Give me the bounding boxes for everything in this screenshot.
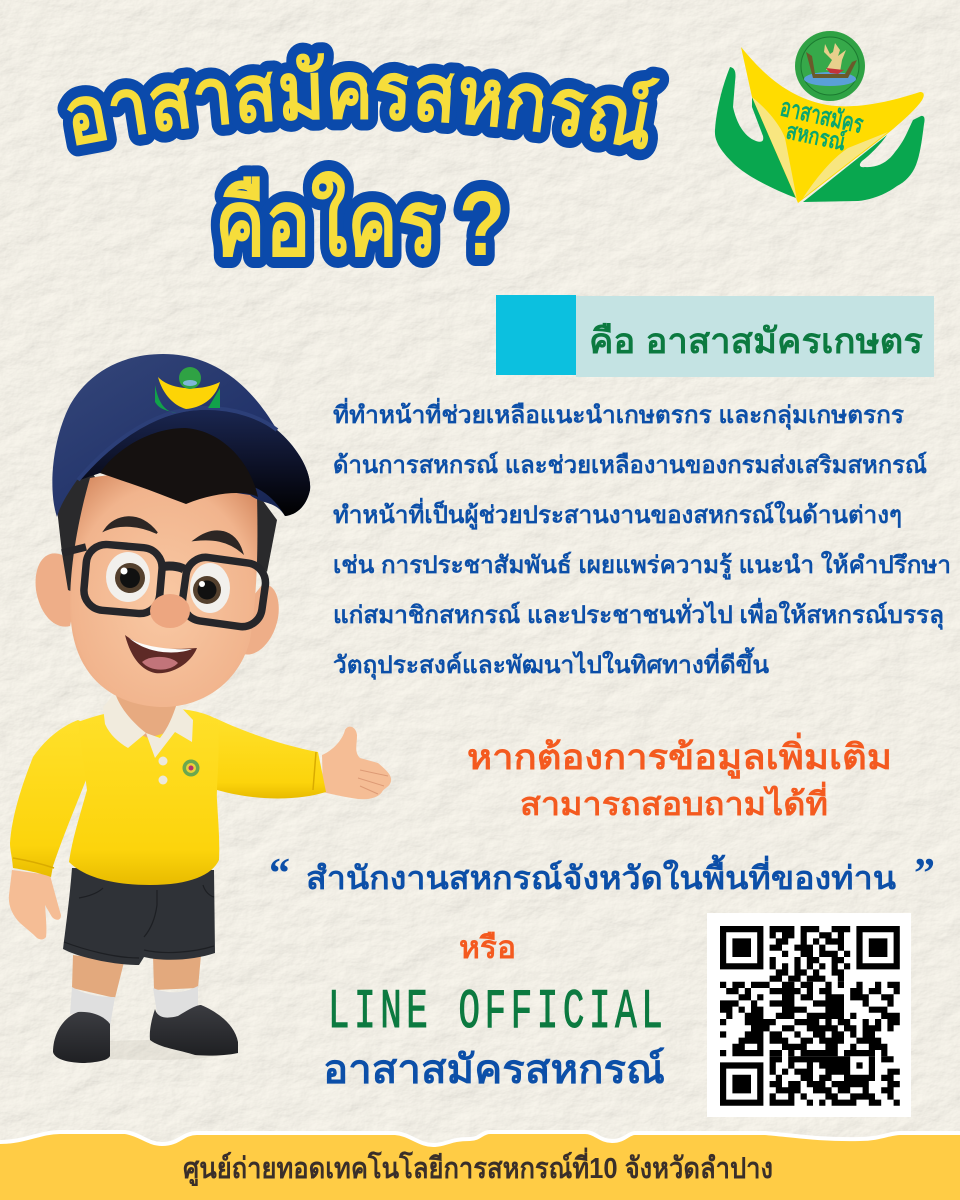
logo yellow ribbon bbox=[741, 47, 924, 203]
shirt buttons bbox=[158, 756, 168, 784]
description text block: ทำหน้าที่เป็นผู้ช่วยประสานงานของสหกรณ์ในด้านต่างๆ bbox=[333, 497, 902, 530]
contact heading: สามารถสอบถามได้ที่ bbox=[520, 781, 828, 822]
left sock bbox=[70, 987, 115, 1026]
description text block: เช่น การประชาสัมพันธ์ เผยแพร่ความรู้ แนะนำ ให้คำปรึกษา bbox=[333, 550, 951, 580]
cap bbox=[52, 354, 310, 517]
description text block: วัตถุประสงค์และพัฒนาไปในทิศทางที่ดีขึ้น bbox=[333, 646, 770, 681]
left eye bbox=[106, 552, 150, 602]
logo text bbox=[778, 94, 866, 155]
banner text: คือ อาสาสมัครเกษตร bbox=[589, 322, 923, 361]
title line 1: อาสาสมัครสหกรณ์ bbox=[58, 42, 670, 160]
description text block bbox=[333, 397, 951, 681]
nose bbox=[150, 594, 190, 628]
cap logo bbox=[155, 367, 220, 413]
cap under brim bbox=[80, 410, 310, 516]
description text block: ที่ทำหน้าที่ช่วยเหลือแนะนำเกษตรกร และกลุ่มเกษตรกร bbox=[333, 397, 904, 431]
mouth bbox=[125, 635, 197, 673]
logo text: อาสาสมัคร bbox=[778, 94, 866, 139]
logo: volunteer cooperative hands bbox=[715, 31, 925, 203]
logo text: สหกรณ์ bbox=[784, 117, 848, 155]
office quote: สำนักงานสหกรณ์จังหวัดในพื้นที่ของท่าน bbox=[306, 854, 896, 896]
contact heading bbox=[467, 732, 892, 822]
shorts bbox=[63, 868, 215, 965]
cap brim edge bbox=[78, 408, 277, 480]
right hand bbox=[322, 727, 391, 799]
torso sweater bbox=[69, 708, 219, 885]
or label: หรือ bbox=[459, 930, 516, 965]
footer band bbox=[0, 1132, 960, 1200]
office quote: ” bbox=[914, 851, 935, 897]
glasses bbox=[62, 543, 268, 629]
description text block: ด้านการสหกรณ์ และช่วยเหลืองานของกรมส่งเสริมสหกรณ์ bbox=[333, 451, 927, 479]
logo seal bbox=[795, 31, 865, 101]
right arm sleeve bbox=[215, 718, 326, 798]
left shoe bbox=[53, 1012, 110, 1063]
right ear bbox=[243, 585, 279, 655]
volunteer name: อาสาสมัครสหกรณ์ bbox=[323, 1047, 665, 1092]
left hand bbox=[9, 870, 61, 939]
qr code bbox=[707, 913, 911, 1117]
collar bbox=[103, 693, 193, 758]
banner cyan block bbox=[496, 295, 576, 375]
office quote bbox=[269, 851, 935, 897]
line official label: LINE OFFICIAL bbox=[328, 982, 663, 1045]
mascot character bbox=[9, 354, 391, 1063]
face bbox=[70, 473, 257, 707]
logo pale strips bbox=[752, 97, 888, 200]
description text block: แก่สมาชิกสหกรณ์ และประชาชนทั่วไป เพื่อให้สหกรณ์บรรลุ bbox=[333, 597, 944, 631]
left ear bbox=[36, 553, 78, 627]
cap silhouette bbox=[52, 354, 310, 517]
contact heading: หากต้องการข้อมูลเพิ่มเติม bbox=[467, 732, 892, 779]
fringe hair bbox=[100, 428, 258, 504]
title bbox=[58, 42, 670, 275]
heading banner bbox=[496, 295, 934, 377]
logo right green hand bbox=[803, 116, 925, 202]
right eyebrow bbox=[195, 531, 242, 552]
neck bbox=[115, 688, 178, 738]
banner pale panel bbox=[576, 296, 934, 377]
footer text: ศูนย์ถ่ายทอดเทคโนโลยีการสหกรณ์ที่10 จังหวัดลำปาง bbox=[183, 1147, 773, 1186]
title line 2: คือใคร ? bbox=[215, 171, 505, 275]
left eyebrow bbox=[105, 517, 157, 533]
left leg bbox=[72, 955, 124, 998]
right leg bbox=[153, 955, 201, 990]
ground shadow bbox=[62, 1040, 238, 1060]
right eye bbox=[190, 563, 230, 613]
right sock bbox=[153, 986, 198, 1019]
chest badge bbox=[182, 760, 200, 776]
office quote: “ bbox=[269, 851, 290, 897]
back hair bbox=[56, 462, 277, 592]
right shoe bbox=[150, 1005, 238, 1056]
left arm sleeve bbox=[10, 720, 98, 877]
footer wavy shape bbox=[0, 1132, 960, 1200]
logo left green hand bbox=[715, 67, 796, 198]
